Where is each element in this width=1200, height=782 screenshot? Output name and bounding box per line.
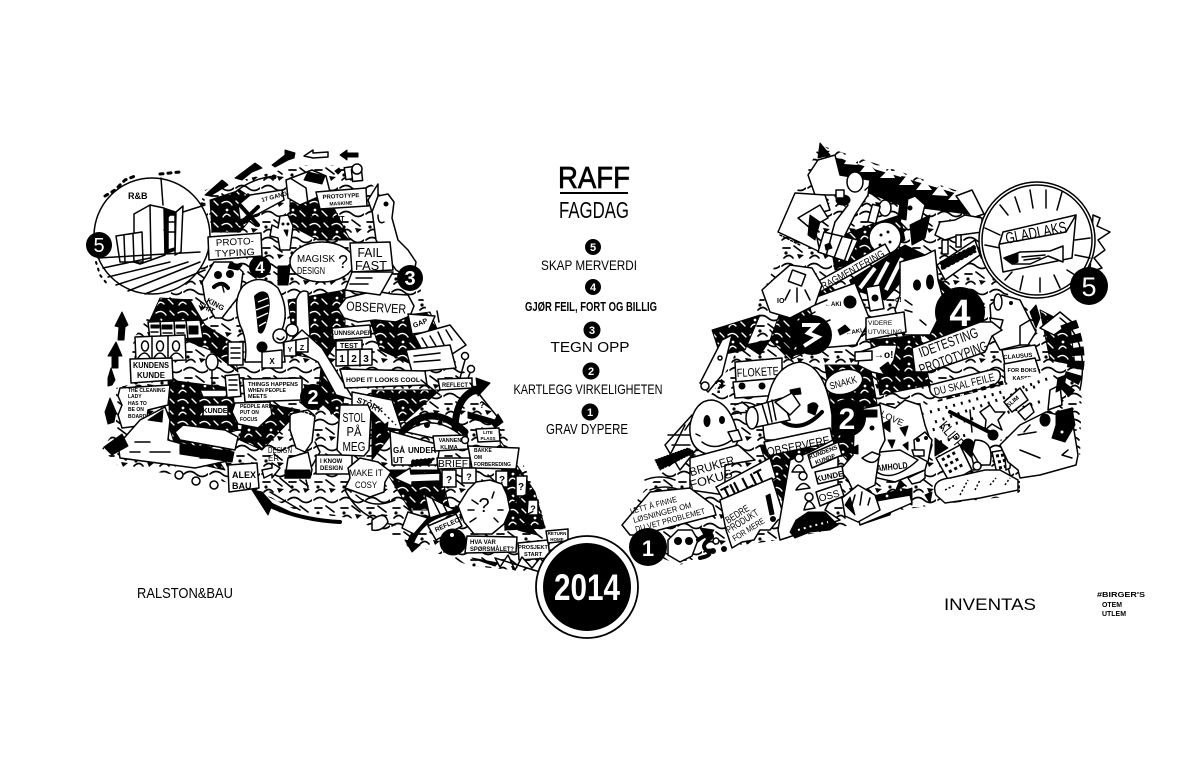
- akt tab: [800, 283, 870, 348]
- paper cards row: [148, 320, 203, 340]
- kundens kunde people: KUNDE: [815, 469, 845, 484]
- badge 1 right: 1: [642, 536, 654, 561]
- kundens kunde people: OSS: [818, 488, 841, 505]
- idetesting speech bubble: PROTOTYPING: [917, 337, 990, 377]
- cloud fence top: [935, 215, 982, 254]
- question tiles: ?: [466, 472, 472, 482]
- alex bau sign: ALEX: [232, 470, 256, 480]
- gladlaks circle: GLADLAKS: [1004, 219, 1068, 248]
- orbit arc and scribble: 17 GANG: [261, 191, 288, 204]
- bubble o!: [855, 345, 897, 375]
- fish creature: ?: [714, 377, 724, 397]
- step 5: skap merverdi: 5: [590, 242, 596, 254]
- crown head: [840, 405, 885, 495]
- bakke box: [468, 446, 519, 469]
- bedre produkt burst: PRODUKT: [724, 508, 761, 536]
- title: RAFF Fagdag: RAFF: [558, 160, 630, 195]
- snakk bubble: SNAKK: [828, 375, 859, 393]
- ga ut panel: [378, 422, 440, 465]
- fail fast box: FAIL: [358, 245, 382, 260]
- house grid: [936, 445, 1010, 483]
- hva var sporsmalet box: HVA VAR: [470, 540, 497, 546]
- kundens kunde people: [778, 440, 845, 540]
- stol pa meg sign: PÅ: [346, 424, 362, 439]
- badge 2 left: [300, 384, 326, 410]
- badge 4 left: 4: [255, 258, 265, 277]
- outlined arrow: [394, 458, 440, 486]
- question tiles: ?: [518, 482, 524, 493]
- arrows along top: [205, 150, 358, 196]
- flokete label: [733, 358, 782, 398]
- return home box: HOME: [550, 537, 564, 542]
- balloon: exclamation mark: [237, 279, 285, 362]
- know design label: [316, 455, 352, 474]
- 2014 medallion: [536, 536, 638, 638]
- black curved arrows: ?: [479, 400, 485, 410]
- dotted stars field: [925, 370, 1060, 460]
- people put on focus note: [232, 402, 273, 428]
- kundens kunde people: KUNDENS: [809, 445, 839, 461]
- badge 4 left: [249, 256, 271, 278]
- people put on focus note: FOCUS: [240, 417, 258, 423]
- step 1: grav dypere: [546, 404, 628, 438]
- magisk design bubble: DESIGN: [297, 266, 325, 277]
- title: RAFF Fagdag: FAGDAG: [559, 197, 629, 223]
- badge 5 right: [1070, 267, 1108, 305]
- mask face and s arrow: [668, 528, 726, 562]
- headphones character: [865, 182, 930, 245]
- curled pages: [406, 325, 466, 372]
- akt tab: AKI→: [806, 318, 823, 332]
- little class box: PLASS: [480, 436, 496, 441]
- tube and smiley heads: [262, 291, 354, 400]
- step 1: grav dypere: GRAV DYPERE: [546, 421, 628, 438]
- stol pa meg sign: STOL: [342, 410, 366, 425]
- ghost: [368, 184, 416, 280]
- slim glue stick: [1004, 388, 1034, 420]
- prototyping box: TYPING: [215, 247, 255, 260]
- magisk design bubble: MAGISK: [297, 254, 335, 265]
- akt tab: ←AKI: [825, 302, 842, 308]
- slim glue stick: SLIM: [1006, 395, 1021, 409]
- badge 2 right: [828, 399, 866, 437]
- love bunny: SAMHOLD: [871, 460, 909, 474]
- prototyping box: [208, 233, 262, 260]
- spikes beneath: [472, 555, 550, 572]
- prosjekt start box: PROSJEKT: [518, 545, 548, 551]
- tube and smiley heads: X: [269, 357, 275, 366]
- kunnskaper test 123: 3: [363, 354, 369, 365]
- seal and waves: [104, 407, 232, 468]
- fish creature: [700, 325, 800, 397]
- prototype machine: X SHIT: [322, 216, 345, 223]
- badge 5 right: 5: [1081, 272, 1097, 302]
- grumpy face king shit: KING: [205, 296, 226, 313]
- ground blob: [935, 462, 1018, 503]
- dots around circle: [96, 172, 180, 285]
- left fan silhouette: [102, 165, 552, 572]
- ga ut panel: UNDER: [408, 446, 437, 455]
- vidare utvikling box: [866, 285, 906, 340]
- bedre produkt burst: FOR MERE: [730, 516, 767, 543]
- prototyping box: PROTO-: [216, 236, 254, 249]
- kunnskaper test 123: KUNNSKAPER: [330, 331, 373, 337]
- magisk design bubble: [290, 242, 354, 282]
- designer figure: DESIGN: [268, 446, 292, 455]
- hope it looks cool banner: HOPE IT LOOKS COOL: [346, 377, 420, 384]
- diagram cloud: IO: [777, 298, 785, 305]
- hope it looks cool banner: [340, 369, 427, 388]
- bubble o!: →o!: [874, 350, 893, 361]
- reflect label top: [438, 378, 472, 390]
- little figure and box stack: FOR BOKS: [1007, 368, 1037, 374]
- question tiles: [442, 468, 538, 530]
- kundens kunde people: KUNDE: [815, 454, 837, 467]
- binoculars: [746, 393, 800, 429]
- stol pa meg sign: MEG: [342, 439, 366, 454]
- stol pa meg sign: [337, 405, 371, 456]
- cloud: the client's note: BE ON: [128, 407, 144, 413]
- label: Inventas: INVENTAS: [944, 595, 1036, 614]
- gap note: GAP: [412, 318, 429, 330]
- striped ramp: [850, 245, 925, 300]
- observing egg: [763, 362, 832, 440]
- bedre produkt burst: [720, 478, 790, 548]
- tube and smiley heads: Z: [300, 345, 305, 352]
- papers top right: [335, 164, 363, 181]
- badge 2 left: 2: [307, 387, 319, 409]
- badge 4 right: [935, 287, 985, 337]
- grumpy face king shit: SHIT: [197, 300, 217, 316]
- lett a finne loesninger panel: LETT Å FINNE: [629, 495, 678, 516]
- pennant banner triangles: [818, 143, 984, 218]
- step 4: gjor feil: 4: [590, 282, 597, 294]
- circle: R&B office illustration: R&B: [128, 191, 148, 201]
- badge 5 left: 5: [93, 235, 105, 257]
- small arrows at base: [855, 470, 932, 525]
- prosjekt start box: START: [524, 552, 543, 558]
- tillit sign: TILLIT: [718, 465, 768, 504]
- small egg bruker: BRUKER: [688, 453, 736, 479]
- small egg bruker: [688, 400, 755, 495]
- badge 5 left: [86, 232, 112, 258]
- cloud: the client's note: THE CLEANING: [128, 388, 166, 394]
- designer figure: [262, 410, 320, 488]
- bedre produkt burst: BEDRE: [724, 503, 752, 526]
- lett a finne loesninger panel: LØSNINGER OM: [632, 501, 693, 525]
- designer figure: ER: [268, 454, 279, 463]
- badge 3 left: [397, 265, 423, 291]
- step 2: kartlegg virkeligheten: 2: [588, 366, 594, 378]
- step 2: kartlegg virkeligheten: [514, 362, 662, 397]
- badge 2 right: 2: [839, 403, 855, 436]
- fragmentering label: FRAGMENTERING: [815, 248, 887, 295]
- question tiles: ?: [530, 504, 536, 514]
- clapper block paper: [778, 193, 830, 252]
- prototype machine: PROTOTYPE: [322, 193, 360, 201]
- top creature: [808, 155, 870, 250]
- love bunny: [865, 400, 932, 482]
- face with tongue: [990, 294, 1030, 350]
- desk and kunde column: [175, 354, 238, 462]
- hva var sporsmalet box: SPØRSMÅLET?: [470, 546, 514, 553]
- alex bau sign: BAU: [232, 481, 252, 491]
- vannen klima box: [433, 435, 468, 451]
- things happen box: MEETS: [248, 394, 267, 400]
- reflect strip and curl: REFLECT: [434, 515, 464, 534]
- step 5: skap merverdi: SKAP MERVERDI: [541, 258, 637, 273]
- step 3: tegn opp: TEGN OPP: [550, 339, 630, 356]
- question tiles: ?: [446, 475, 452, 486]
- little figure and box stack: KASSE: [1013, 376, 1032, 382]
- orbit arc and scribble: [232, 174, 288, 225]
- label: Ralston and Bau: RALSTON&BAU: [137, 585, 233, 602]
- panel: left fan Ralston and Bau: [86, 150, 568, 572]
- step list: [514, 239, 662, 438]
- love bunny: LOVE: [879, 409, 905, 428]
- know design label: I KNOW: [320, 459, 343, 465]
- cloud: the client's note: HAS TO: [128, 401, 147, 407]
- little figure and box stack: CLAUSUS: [1003, 353, 1033, 361]
- kunnskaper test 123: 2: [351, 354, 357, 365]
- bakke box: BAKKE: [474, 448, 492, 454]
- badge 1 right: [629, 528, 667, 566]
- badge 3 right: [792, 315, 832, 355]
- cloud: the client's note: BOARD: [128, 414, 147, 420]
- klipp scissors: [935, 410, 998, 465]
- cloud: the client's note: [118, 385, 170, 428]
- idetesting speech bubble: IDETESTING: [916, 324, 980, 360]
- up arrows left margin: [105, 312, 128, 424]
- character with ears: [895, 240, 980, 335]
- gap note: [408, 311, 439, 334]
- little figure and box stack: [1002, 305, 1072, 390]
- make it cosy cloud: COSY: [355, 480, 377, 490]
- things happen box: WHEN PEOPLE: [248, 388, 286, 394]
- make it cosy cloud: [345, 458, 395, 530]
- panel: right fan Inventas: [622, 143, 1110, 566]
- disc with dots: [869, 222, 901, 254]
- observer cloud: [338, 291, 414, 322]
- observer cloud: OBSERVER: [346, 298, 407, 317]
- desk and kunde column: KUNDE: [203, 408, 228, 415]
- prototype machine: MASKINE: [329, 200, 353, 208]
- ga ut panel: GÅ: [393, 446, 405, 455]
- things happen box: THINGS HAPPENS: [248, 382, 298, 388]
- badge 4 right: 4: [949, 293, 971, 335]
- black ink mass left: [150, 185, 545, 530]
- du skal feile pill: DU SKAL FEILE: [933, 372, 996, 398]
- risk tiles: [818, 232, 858, 262]
- story strip: STORY: [355, 396, 384, 415]
- tube and smiley heads: Y: [288, 347, 293, 354]
- signature: Birger's: OTEM: [1102, 602, 1122, 609]
- gladlaks circle: [979, 182, 1110, 298]
- dome with face: [402, 416, 465, 440]
- step 4: gjor feil: [525, 279, 657, 314]
- lett a finne loesninger panel: [622, 488, 716, 535]
- badge 3 left: 3: [404, 268, 416, 290]
- kundens kunde box: KUNDENS: [133, 361, 170, 370]
- cloud: the client's note: LADY: [128, 394, 142, 400]
- vannen klima box: VANNEN: [439, 438, 461, 444]
- smiling figure: [270, 215, 293, 285]
- kundens kunde box: [130, 358, 173, 383]
- lett a finne loesninger panel: DU VET PROBLEMET: [634, 507, 706, 534]
- fail fast box: [345, 242, 393, 295]
- question tiles: ?: [499, 475, 505, 486]
- prototype machine: [286, 170, 367, 223]
- magisk design bubble: ?: [338, 252, 348, 272]
- fingers bump: [842, 485, 880, 522]
- black ball: [440, 528, 466, 556]
- lollipops: [460, 352, 474, 378]
- title: RAFF Fagdag: [558, 160, 630, 223]
- people cards: [135, 335, 186, 362]
- step 3: tegn opp: 3: [589, 325, 595, 337]
- prosjekt start box: [518, 540, 550, 560]
- kunnskaper test 123: 1: [339, 354, 345, 365]
- vannen klima box: KLIMA: [440, 445, 458, 451]
- papers: [225, 342, 243, 398]
- story strip: [352, 392, 402, 430]
- black curved arrows: [421, 378, 503, 430]
- alex bau sign: [228, 463, 259, 492]
- flokete label: FLOKETE: [736, 364, 779, 380]
- flower with question mark: ?: [478, 495, 490, 517]
- 2014 medallion: 2014: [554, 567, 620, 608]
- kunnskaper test 123: TEST: [340, 343, 359, 350]
- bakke box: OM: [474, 455, 482, 461]
- grumpy face king shit: [197, 262, 243, 318]
- brief label: BRIEF: [438, 458, 468, 470]
- reflect label top: REFLECT: [442, 382, 468, 389]
- step 2: kartlegg virkeligheten: KARTLEGG VIRKELIGHETEN: [514, 381, 662, 397]
- little class box: [476, 428, 500, 442]
- people put on focus note: PEOPLE ARE: [240, 404, 273, 410]
- return home box: RETURN: [548, 531, 566, 536]
- big blob character: [1000, 375, 1078, 478]
- return home box: [518, 525, 568, 543]
- fail fast box: FAST: [355, 258, 387, 273]
- step 3: tegn opp: [550, 322, 630, 356]
- bakke box: FORBEREDING: [474, 462, 511, 468]
- observere label: OBSERVERE: [765, 433, 831, 459]
- ga ut panel: UT: [393, 456, 404, 465]
- signature: Birger's: [1097, 592, 1145, 618]
- step 5: skap merverdi: [541, 239, 637, 273]
- right fan silhouette: [624, 145, 1082, 565]
- small knobs and bottom spikes: [175, 471, 340, 522]
- vidare utvikling box: VIDERE: [868, 320, 893, 327]
- signature: Birger's: #BIRGER'S: [1097, 592, 1145, 599]
- klipp scissors: KLIPP: [935, 418, 968, 452]
- vidare utvikling box: →o!: [888, 297, 902, 304]
- black mouth: [790, 512, 838, 538]
- signature: Birger's: UTLEM: [1102, 611, 1126, 618]
- make it cosy cloud: MAKE IT: [349, 468, 383, 478]
- wavy sea: [645, 402, 758, 500]
- flower with question mark: [458, 480, 510, 534]
- vidare utvikling box: UTVIKLING: [868, 329, 902, 336]
- akt tab: ←AKL: [845, 328, 865, 337]
- small egg bruker: FOKUS: [688, 466, 734, 492]
- black ink mass right: [712, 155, 1075, 525]
- striped tail: [1052, 318, 1082, 398]
- step 1: grav dypere: 1: [587, 407, 593, 419]
- kunnskaper test 123: [330, 325, 373, 366]
- snakk bubble: [823, 365, 865, 399]
- prototype machine: MAX: [307, 215, 323, 222]
- circle: R&B office illustration: [94, 178, 210, 294]
- hva var sporsmalet box: [465, 536, 517, 553]
- step 4: gjor feil: GJØR FEIL, FORT OG BILLIG: [525, 300, 657, 314]
- know design label: DESIGN: [320, 466, 343, 472]
- diagram cloud: [762, 265, 822, 318]
- kundens kunde box: KUNDE: [137, 371, 166, 380]
- little class box: LITE: [483, 430, 493, 435]
- reflect strip and curl: [402, 495, 464, 552]
- people put on focus note: PUT ON: [240, 410, 259, 416]
- things happen box: [243, 378, 302, 402]
